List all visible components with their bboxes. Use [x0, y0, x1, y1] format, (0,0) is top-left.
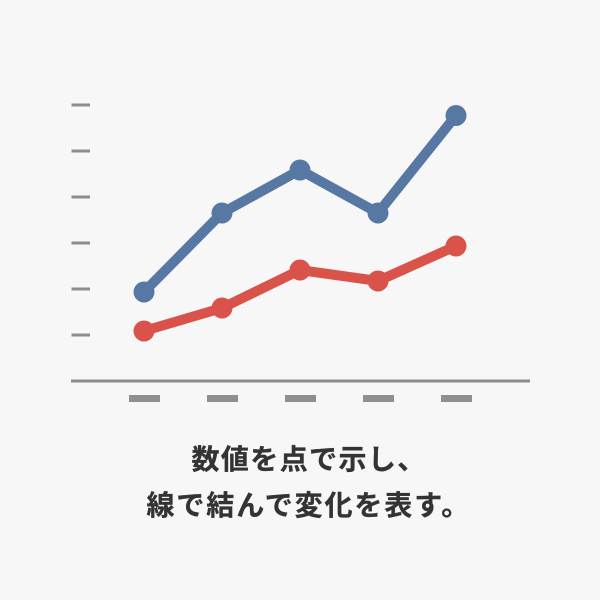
red data series [134, 236, 466, 342]
y axis tick marks [72, 104, 90, 336]
blue data series [134, 105, 466, 302]
caption text: 数値を点で示し、 [192, 444, 427, 475]
caption text: 線で結んで変化を表す。 [146, 490, 471, 521]
caption text [146, 444, 471, 521]
x axis baseline [71, 380, 530, 382]
x axis category marks [129, 395, 472, 402]
